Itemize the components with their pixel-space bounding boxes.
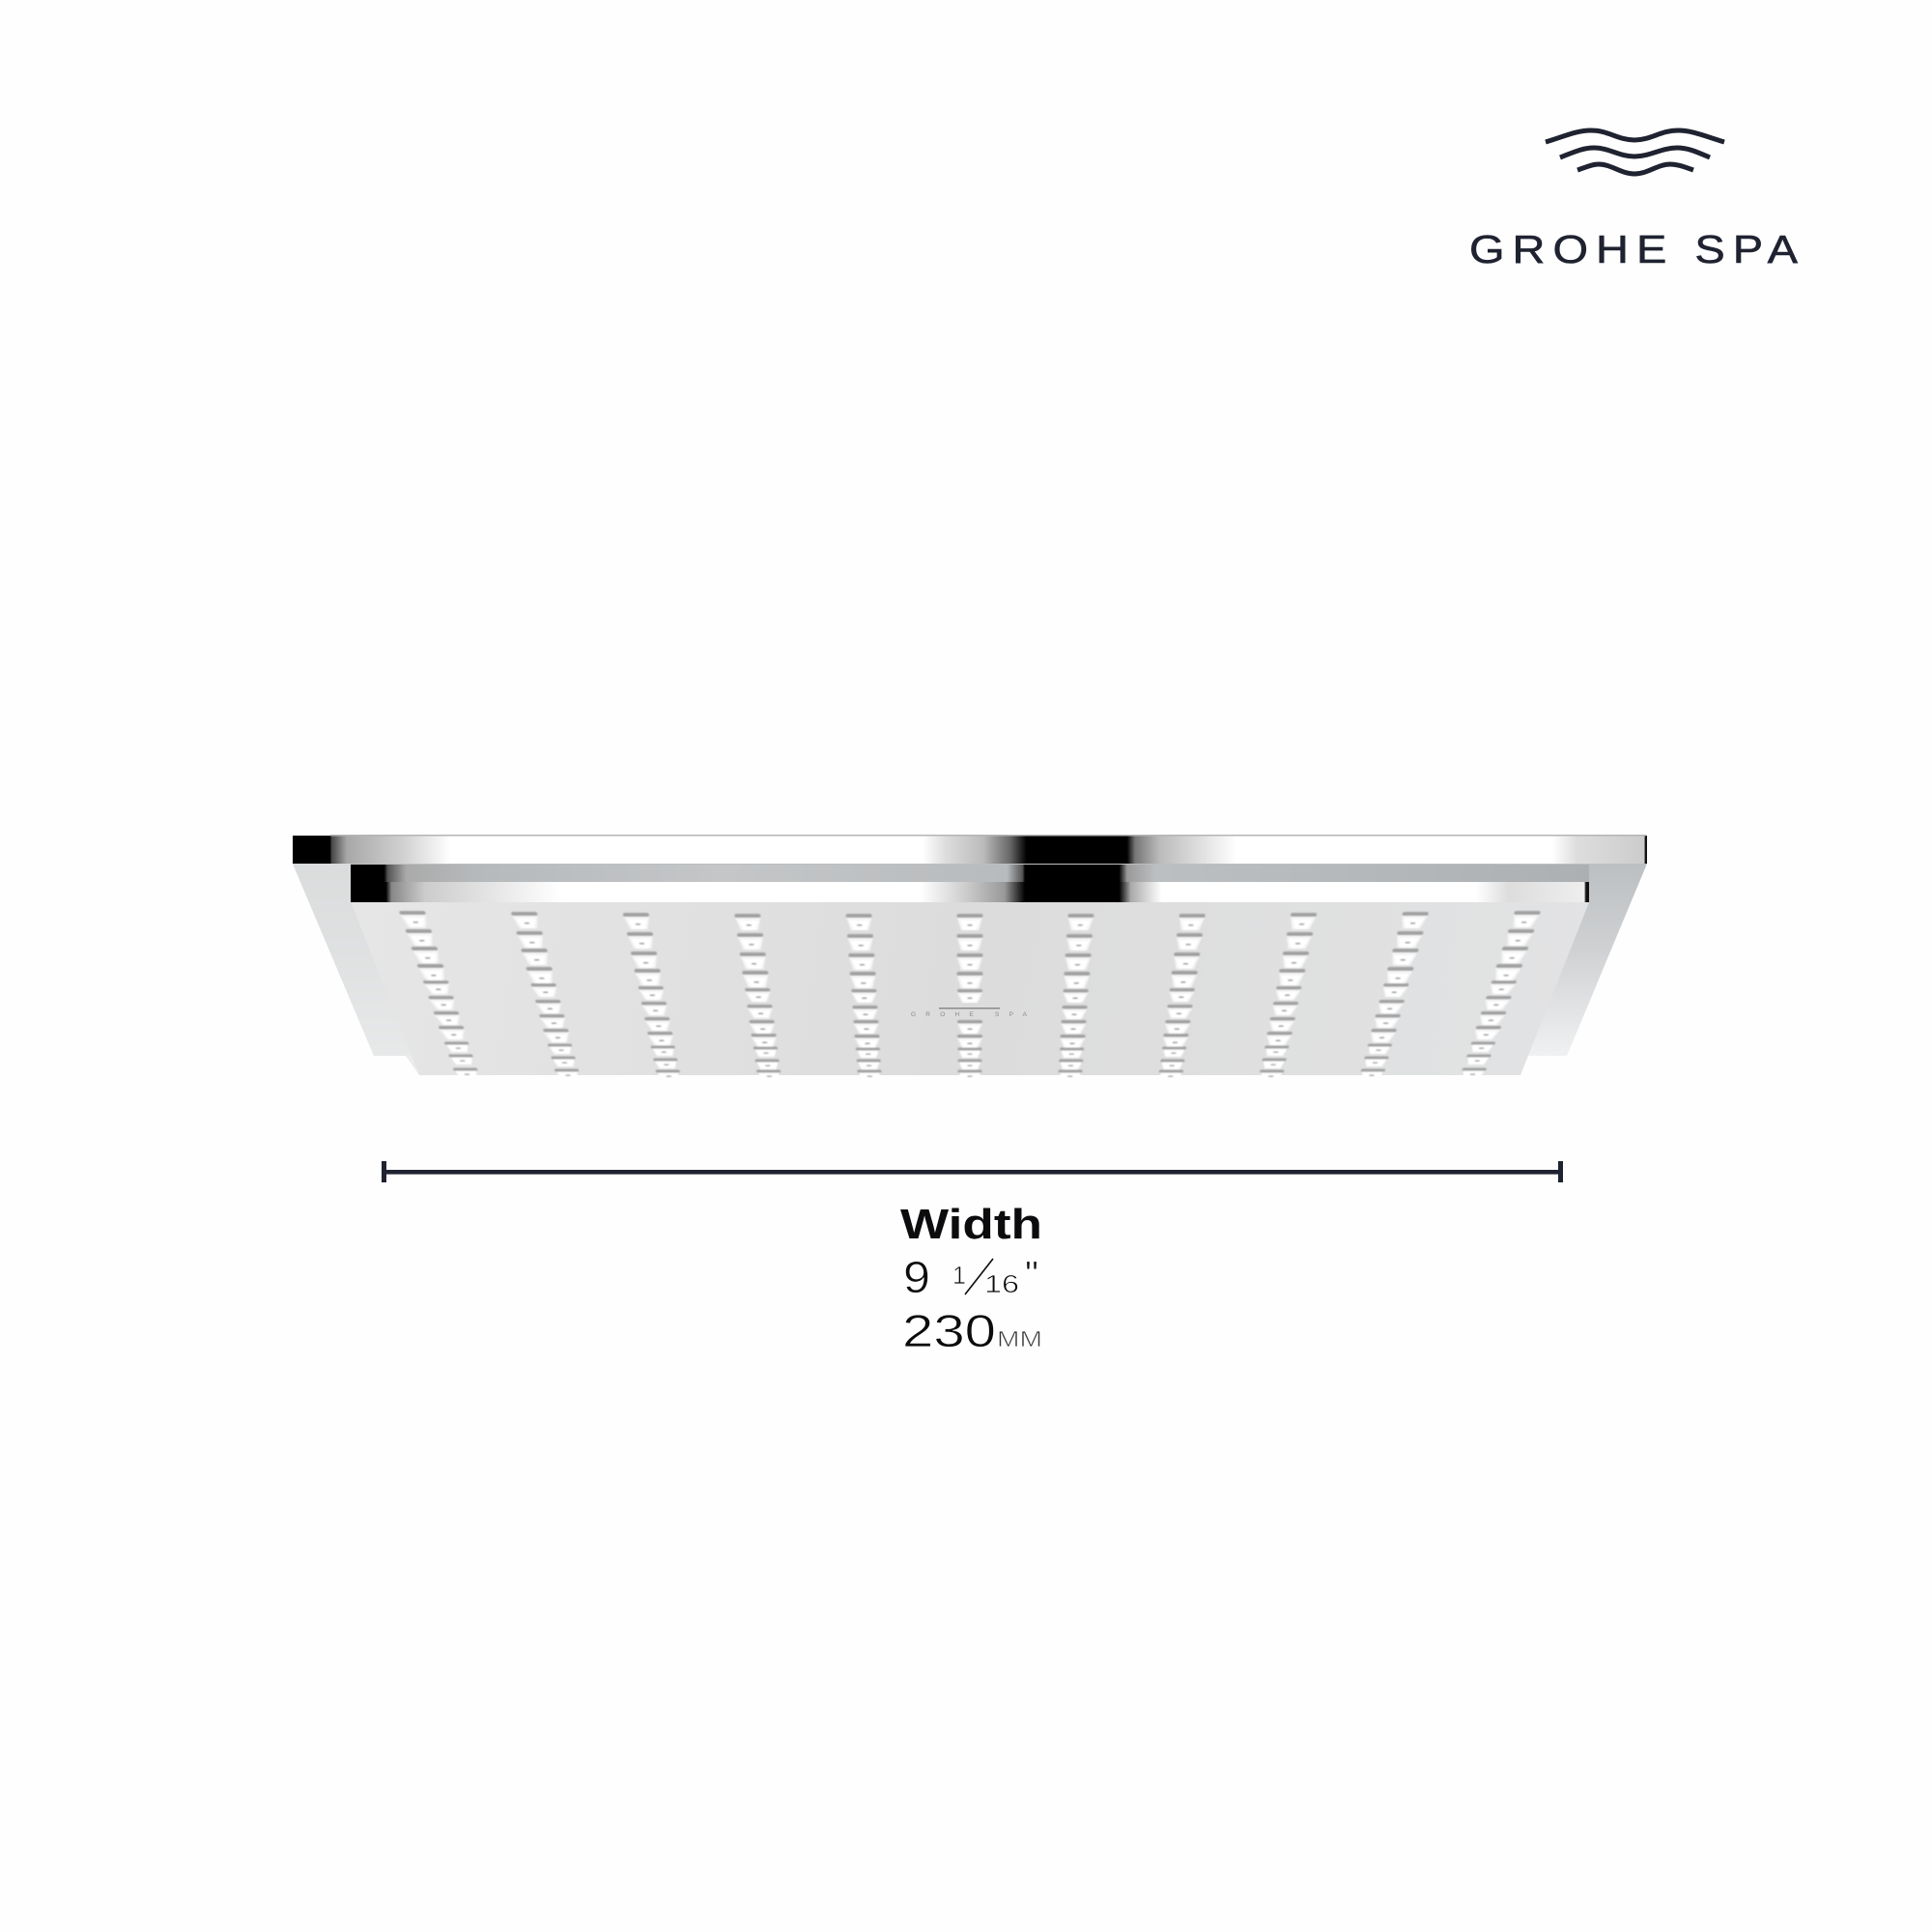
middle chrome bar	[351, 865, 1589, 882]
width dimension line	[382, 1161, 1563, 1182]
product: shower head	[293, 835, 1647, 1080]
left plate bevel highlight	[293, 864, 419, 1075]
spray face panel	[351, 902, 1589, 1075]
icon: three water waves	[1546, 130, 1724, 174]
outer plate underside	[293, 864, 1647, 1056]
value: inches: 1	[952, 1261, 966, 1290]
value: inches: "	[1025, 1255, 1038, 1295]
value: inches: 16	[984, 1269, 1019, 1298]
value: millimetres: MM	[997, 1326, 1042, 1351]
value: millimetres	[902, 1305, 1042, 1356]
top bar edge line	[330, 835, 1646, 837]
label: Width: Width	[900, 1201, 1042, 1248]
fraction slash	[965, 1259, 993, 1294]
face logo	[911, 1008, 1028, 1018]
top chrome bar	[293, 836, 1647, 864]
value: inches: 9	[903, 1252, 930, 1302]
lower chrome bar	[351, 882, 1589, 902]
spray nozzles	[399, 911, 1541, 1080]
value: inches	[903, 1252, 1038, 1302]
logo: GROHE SPA	[1469, 130, 1805, 271]
face logo: GROHE SPA	[911, 1011, 1028, 1018]
dimension label	[900, 1201, 1042, 1356]
logo wordmark: GROHE SPA	[1469, 227, 1805, 271]
value: millimetres: 230	[902, 1305, 996, 1356]
